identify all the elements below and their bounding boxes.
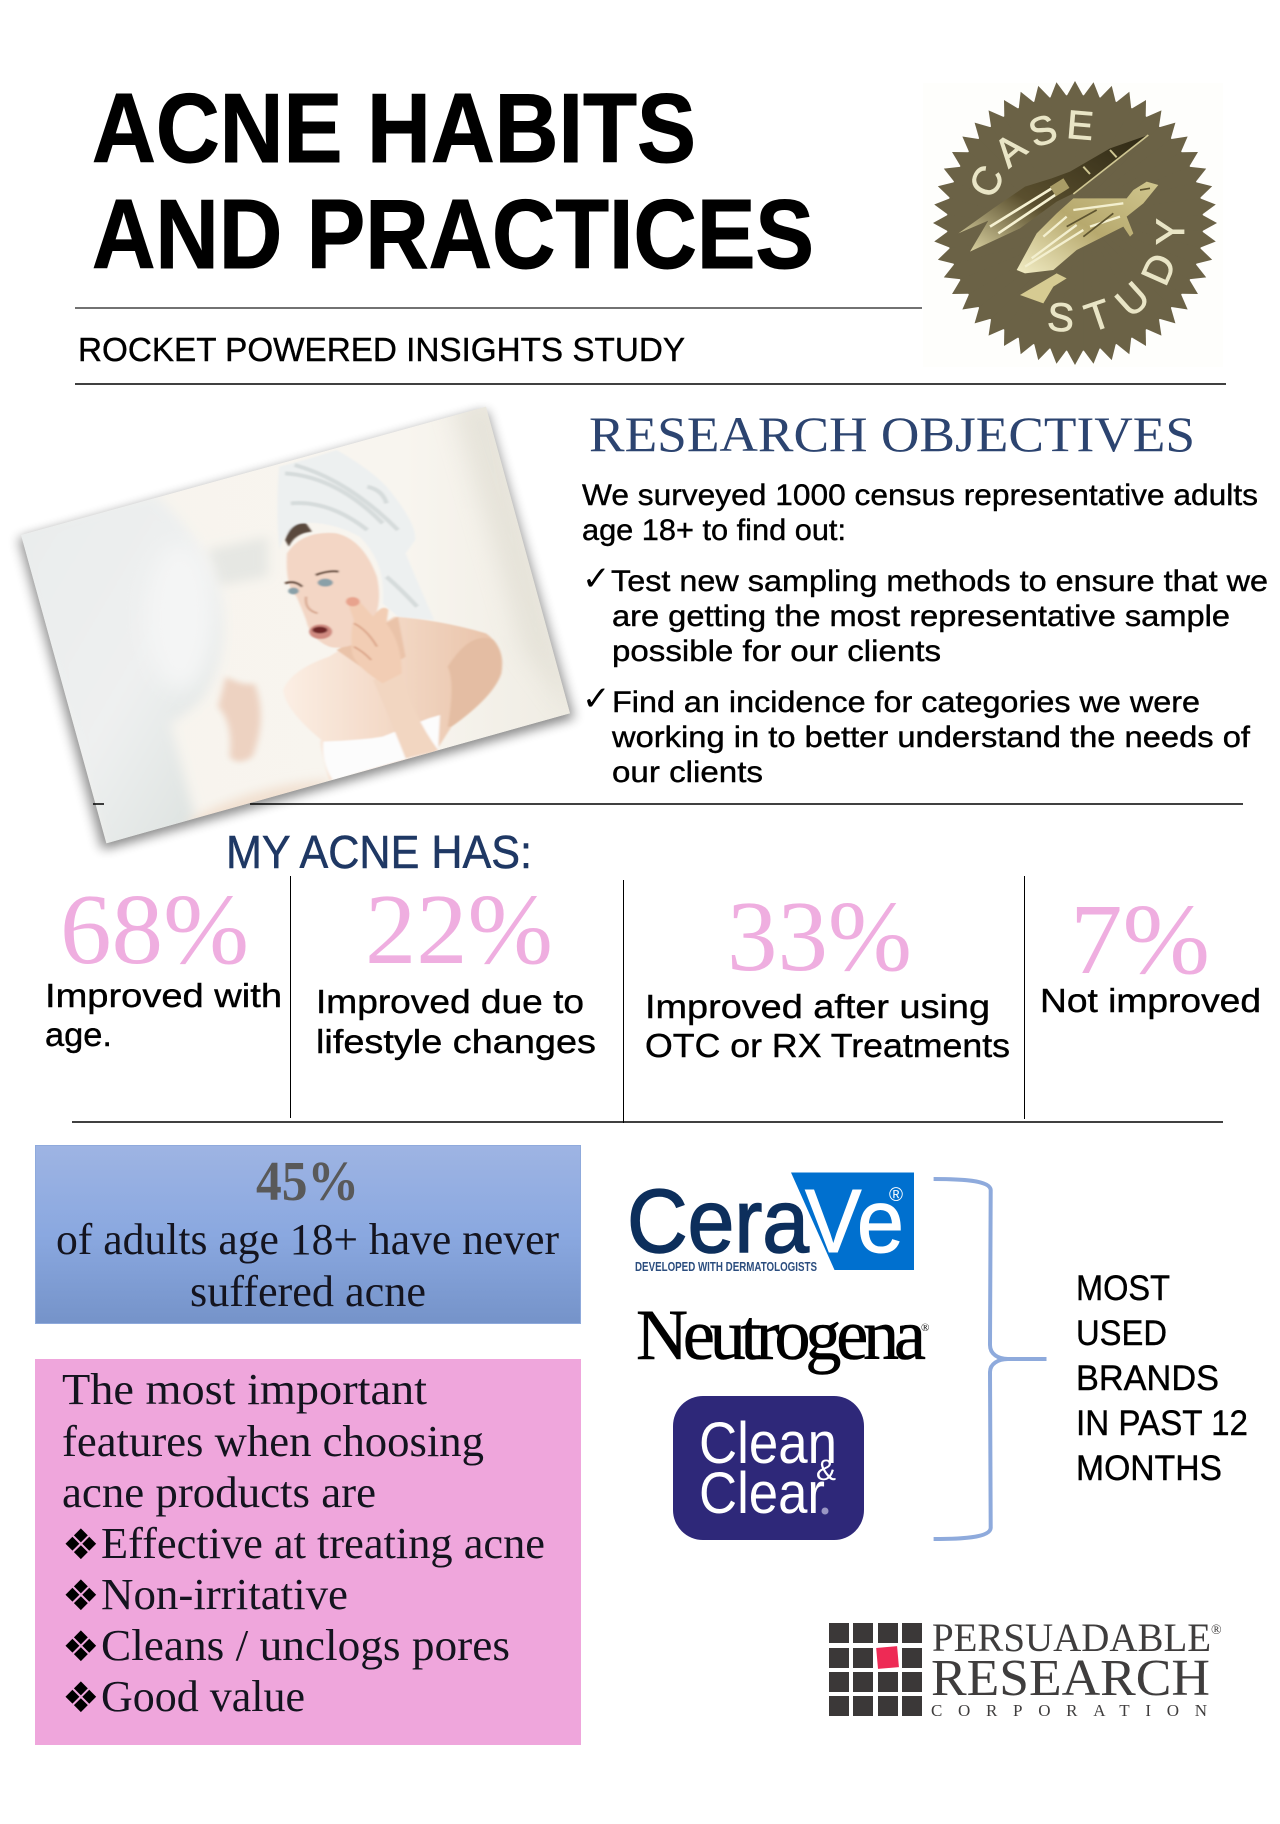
logo: clean and clear: Clean [699, 1411, 837, 1476]
divider [622, 880, 624, 1123]
stat: 22 percent improved due to lifestyle changes: lifestyle changes [316, 1023, 596, 1060]
rule under objectives [93, 803, 1243, 805]
divider [290, 876, 292, 1118]
text block: research objectives body: working in to better understand the needs of [611, 721, 1251, 754]
panel: most important features: Non-irritative [101, 1570, 348, 1619]
panel: most important features [35, 1359, 581, 1745]
panel: most important features: Cleans / unclogs pores [101, 1621, 510, 1670]
text block: research objectives body: Test new sampling methods to ensure that we [611, 565, 1268, 598]
icon: case study seal: CASE [972, 110, 1092, 195]
panel: most important features: ❖ [62, 1622, 100, 1671]
stat: 68 percent improved with age: Improved with [45, 977, 282, 1014]
title: ACNE HABITS [92, 73, 696, 183]
title [92, 73, 814, 289]
panel: most important features: acne products are [62, 1468, 376, 1517]
subtitle: ROCKET POWERED INSIGHTS STUDY [78, 331, 685, 368]
panel: most important features: The most important [62, 1365, 427, 1414]
logo: persuadable research corporation: RESEARCH [931, 1650, 1210, 1707]
panel: 45 percent never suffered acne: 45% [256, 1151, 359, 1213]
stat: 22 percent improved due to lifestyle changes [316, 873, 596, 1060]
stat: 68 percent improved with age [45, 873, 282, 1053]
bracket: grouping brands [934, 1179, 1046, 1539]
stat: 33 percent improved after treatments: OTC or RX Treatments [645, 1027, 1010, 1064]
logo: neutrogena: ® [921, 1322, 929, 1334]
panel: 45 percent never suffered acne: suffered acne [190, 1267, 426, 1316]
stat: 7 percent not improved: Not improved [1040, 982, 1261, 1019]
text block: most used brands: IN PAST 12 [1076, 1404, 1248, 1443]
text block: research objectives body: ✓ [582, 559, 610, 599]
panel: most important features: Good value [101, 1672, 305, 1721]
logo: persuadable research corporation: ® [1211, 1623, 1222, 1638]
logo: clean and clear [673, 1396, 864, 1540]
rule under title [75, 307, 922, 309]
stat: 68 percent improved with age: age. [45, 1016, 112, 1053]
text block: research objectives body: We surveyed 1000 census representative adults [582, 479, 1258, 512]
logo: cerave: DEVELOPED WITH DERMATOLOGISTS [635, 1260, 817, 1274]
photo: woman checking acne in mirror [8, 400, 574, 857]
text block: research objectives body: ✓ [582, 679, 610, 719]
logo: persuadable research corporation: CORPORATION [931, 1701, 1207, 1720]
rule under stats [72, 1121, 1223, 1123]
stat: 7 percent not improved: 7% [1070, 883, 1210, 995]
text block: research objectives body: age 18+ to find out: [582, 514, 846, 547]
logo: persuadable research corporation: PERSUADABLE [932, 1615, 1211, 1660]
panel: 45 percent never suffered acne [36, 1146, 580, 1324]
panel: most important features: Effective at treating acne [101, 1519, 545, 1568]
stat: 33 percent improved after treatments: Improved after using [645, 988, 990, 1025]
logo: cerave [627, 1172, 914, 1274]
text block: most used brands: USED [1076, 1314, 1167, 1353]
panel: most important features: ❖ [62, 1571, 100, 1620]
heading: research objectives: RESEARCH OBJECTIVES [589, 406, 1195, 462]
logo: persuadable research corporation [829, 1615, 1222, 1720]
title: AND PRACTICES [92, 179, 814, 289]
panel: most important features: ❖ [62, 1673, 100, 1722]
logo: cerave: Ve [805, 1172, 904, 1272]
stat: 22 percent improved due to lifestyle changes: 22% [365, 873, 553, 985]
text block: most used brands [1076, 1269, 1248, 1488]
stat: 33 percent improved after treatments [645, 880, 1010, 1064]
rule under subtitle [75, 383, 1226, 385]
text block: most used brands: MOST [1076, 1269, 1170, 1308]
logo: cerave: ® [889, 1185, 903, 1206]
stat: 68 percent improved with age: 68% [60, 873, 249, 985]
stat: 22 percent improved due to lifestyle changes: Improved due to [316, 983, 584, 1020]
divider [1024, 876, 1026, 1119]
logo: clean and clear: & [816, 1454, 836, 1487]
text block: most used brands: BRANDS [1076, 1359, 1219, 1398]
text block: research objectives body: Find an incidence for categories we were [612, 686, 1200, 719]
panel: most important features: ❖ [62, 1520, 100, 1569]
text block: research objectives body [582, 479, 1268, 789]
logo: clean and clear: Clear [699, 1461, 825, 1526]
panel: most important features: features when choosing [62, 1417, 484, 1466]
icon: case study seal: STUDY [1048, 218, 1184, 332]
stat: 7 percent not improved [1040, 883, 1261, 1019]
logo: cerave: Cera [627, 1172, 810, 1272]
text block: research objectives body: our clients [612, 756, 763, 789]
logo: neutrogena: Neutrogena [636, 1295, 926, 1375]
heading: my acne has: MY ACNE HAS: [226, 826, 532, 878]
icon: case study seal [933, 81, 1217, 365]
panel: 45 percent never suffered acne: of adults age 18+ have never [56, 1215, 559, 1264]
text block: research objectives body: are getting the most representative sample [612, 600, 1230, 633]
stat: 33 percent improved after treatments: 33% [727, 880, 912, 992]
text block: research objectives body: possible for our clients [612, 635, 941, 668]
text block: most used brands: MONTHS [1076, 1449, 1222, 1488]
